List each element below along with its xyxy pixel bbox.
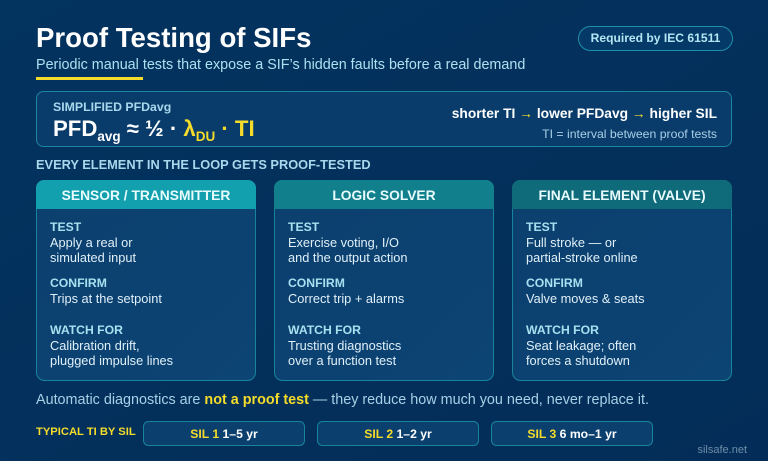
watch for: over a function test bbox=[288, 353, 397, 368]
test: and the output action bbox=[288, 250, 408, 265]
watch for: WATCH FOR bbox=[526, 323, 599, 337]
card header bbox=[274, 180, 494, 209]
pill: SIL 1 bbox=[144, 422, 304, 446]
pill: SIL 2 bbox=[318, 422, 478, 446]
confirm: Correct trip + alarms bbox=[288, 291, 404, 306]
panel: logic solver bbox=[274, 180, 494, 380]
watch for: forces a shutdown bbox=[526, 353, 630, 368]
confirm bbox=[288, 276, 404, 306]
watch for: WATCH FOR bbox=[288, 323, 361, 337]
formula: λ bbox=[183, 116, 196, 141]
test bbox=[526, 220, 638, 265]
formula label: SIMPLIFIED PFDavg bbox=[53, 100, 171, 114]
panel: logic solver: LOGIC SOLVER bbox=[332, 188, 436, 203]
subtitle: Periodic manual tests that expose a SIF’s hidden faults before a real demand bbox=[36, 57, 525, 73]
card header bbox=[36, 180, 256, 209]
watch for: plugged impulse lines bbox=[50, 353, 173, 368]
relationship: shorter TI → lower PFDavg → higher SIL bbox=[452, 106, 717, 121]
accent underline bbox=[36, 77, 143, 80]
test: partial-stroke online bbox=[526, 250, 638, 265]
formula: DU bbox=[196, 129, 215, 144]
test: Full stroke — or bbox=[526, 235, 617, 250]
panel: final element bbox=[512, 180, 732, 380]
section heading: EVERY ELEMENT IN THE LOOP GETS PROOF-TESTED bbox=[36, 157, 371, 172]
test: simulated input bbox=[50, 250, 137, 265]
panel: sensor / transmitter: SENSOR / TRANSMITTER bbox=[62, 188, 230, 203]
test: TEST bbox=[288, 220, 320, 234]
formula: · TI bbox=[215, 116, 255, 141]
test: Apply a real or bbox=[50, 235, 133, 250]
watch for: Calibration drift, bbox=[50, 338, 140, 353]
panel: final element: FINAL ELEMENT (VALVE) bbox=[538, 188, 706, 203]
watermark: silsafe.net bbox=[697, 444, 747, 456]
TI definition: TI = interval between proof tests bbox=[542, 127, 717, 141]
watch for bbox=[50, 323, 173, 368]
confirm: Trips at the setpoint bbox=[50, 291, 162, 306]
badge: required by IEC 61511 bbox=[578, 26, 732, 50]
confirm: CONFIRM bbox=[526, 276, 583, 290]
formula: avg bbox=[97, 129, 121, 144]
panel: sensor / transmitter bbox=[36, 180, 256, 380]
confirm bbox=[50, 276, 162, 306]
watch for bbox=[526, 323, 636, 368]
confirm bbox=[526, 276, 645, 306]
test bbox=[288, 220, 408, 265]
formula: ≈ ½ · bbox=[121, 116, 183, 141]
card header bbox=[512, 180, 732, 209]
watch for: WATCH FOR bbox=[50, 323, 123, 337]
title: Proof Testing of SIFs bbox=[36, 22, 311, 53]
test: Exercise voting, I/O bbox=[288, 235, 399, 250]
pill: SIL 2: SIL 2 1–2 yr bbox=[364, 427, 432, 441]
badge: required by IEC 61511: Required by IEC 61511 bbox=[591, 31, 721, 45]
pill: SIL 1: SIL 1 1–5 yr bbox=[190, 427, 258, 441]
test: TEST bbox=[50, 220, 82, 234]
watch for: Seat leakage; often bbox=[526, 338, 636, 353]
watch for bbox=[288, 323, 401, 368]
test: TEST bbox=[526, 220, 558, 234]
confirm: Valve moves & seats bbox=[526, 291, 645, 306]
diagnostics note: Automatic diagnostics are not a proof test — they reduce how much you need, never replace it. bbox=[36, 392, 649, 408]
panel: formula bbox=[36, 92, 732, 146]
watch for: Trusting diagnostics bbox=[288, 338, 401, 353]
test bbox=[50, 220, 137, 265]
pill: SIL 3: SIL 3 6 mo–1 yr bbox=[527, 427, 617, 441]
typical TI label: TYPICAL TI BY SIL bbox=[36, 426, 136, 438]
pill: SIL 3 bbox=[492, 422, 652, 446]
confirm: CONFIRM bbox=[288, 276, 345, 290]
confirm: CONFIRM bbox=[50, 276, 107, 290]
formula: PFD bbox=[53, 116, 97, 141]
